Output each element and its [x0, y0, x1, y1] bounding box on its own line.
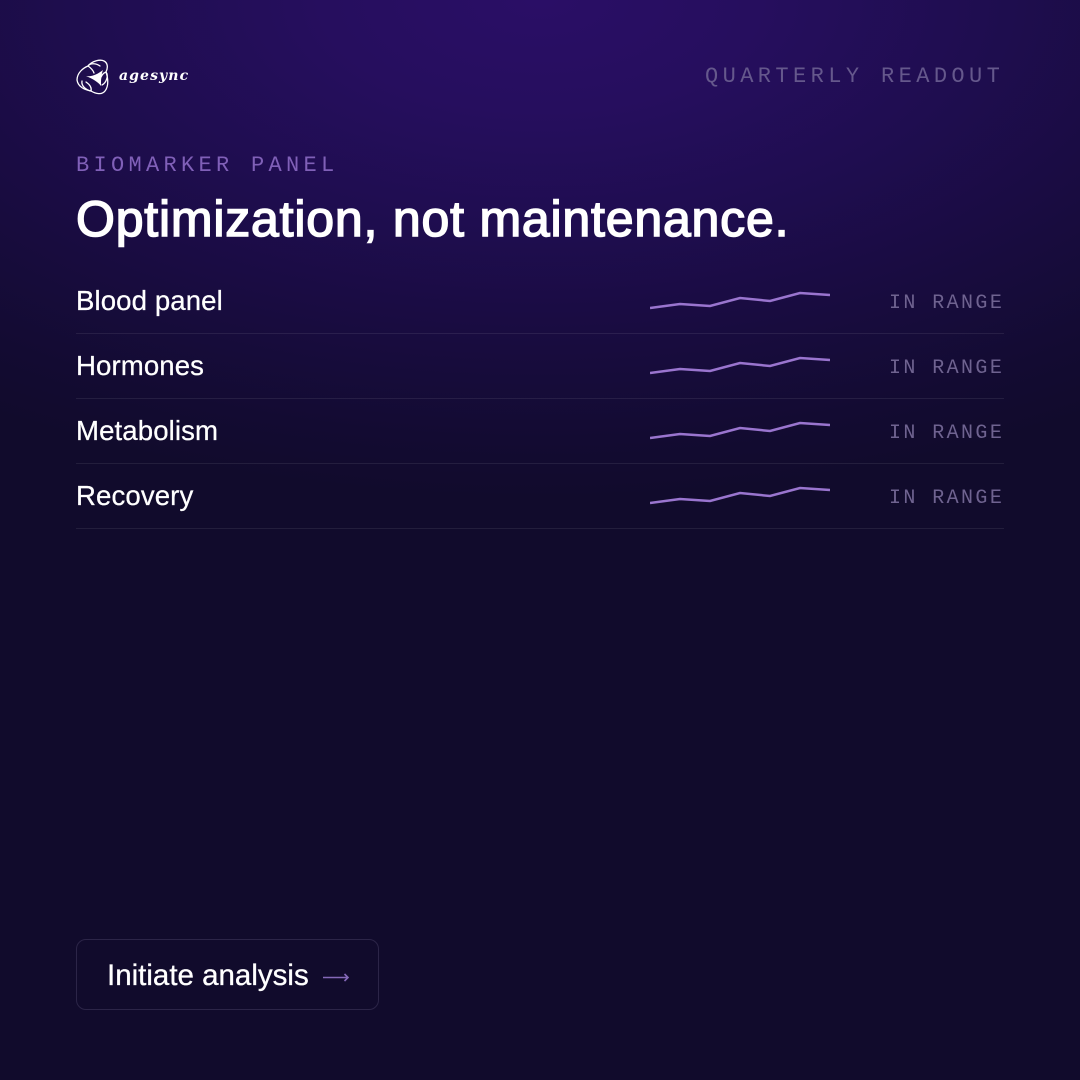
logo — [76, 60, 189, 94]
status: IN RANGE — [889, 422, 1004, 445]
status: IN RANGE — [889, 292, 1004, 315]
row: blood panel — [76, 285, 1004, 334]
title: Optimization, not maintenance. — [76, 191, 789, 247]
arrow — [323, 974, 349, 982]
sparkline — [650, 486, 830, 504]
button label: Initiate analysis — [107, 959, 309, 992]
row label: Recovery — [76, 480, 193, 511]
sparkline — [650, 422, 830, 440]
row label: Blood panel — [76, 285, 223, 316]
status: IN RANGE — [889, 357, 1004, 380]
header tag: quarterly readout: QUARTERLY READOUT — [705, 64, 1004, 89]
eyebrow: BIOMARKER PANEL — [76, 153, 339, 178]
sparkline — [650, 356, 830, 374]
button: initiate analysis — [76, 939, 379, 1010]
row: hormones — [76, 350, 1004, 399]
row label: Metabolism — [76, 415, 218, 446]
row: recovery — [76, 480, 1004, 529]
status: IN RANGE — [889, 487, 1004, 510]
row: metabolism — [76, 415, 1004, 464]
sparkline — [650, 292, 830, 310]
row label: Hormones — [76, 350, 204, 381]
icon: agesync knot — [76, 60, 108, 94]
wordmark: agesync — [119, 68, 189, 84]
